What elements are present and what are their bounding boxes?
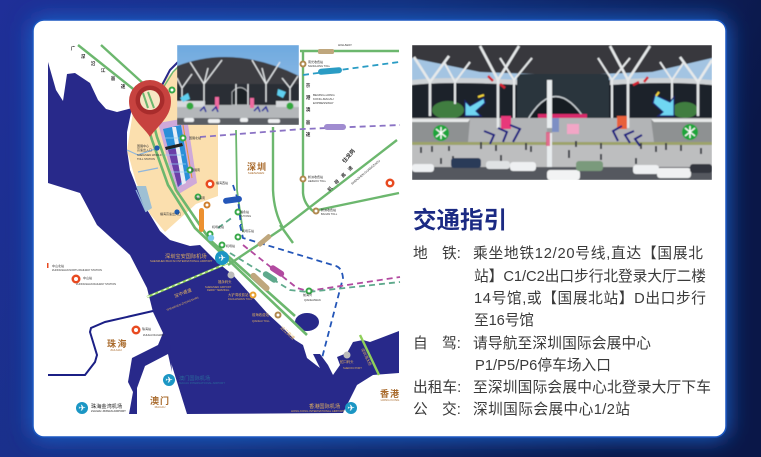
map panel: 高速出入口 xyxy=(137,147,152,152)
sky xyxy=(412,58,712,80)
blue toll stations xyxy=(154,145,180,215)
map panel: FERRY TERMINAL xyxy=(207,288,230,292)
map panel: HONG KONG INTERNATIONAL AIRPORT xyxy=(291,409,345,413)
map panel: SHEKOU PORT xyxy=(343,366,362,370)
water: Macau channel xyxy=(128,333,172,414)
railway stations xyxy=(47,178,394,334)
building side xyxy=(412,80,712,118)
map panel: 国展南 xyxy=(191,167,200,172)
road labels: 速 xyxy=(121,83,126,90)
entrance banners xyxy=(488,76,648,134)
metro directions xyxy=(413,245,706,329)
road xyxy=(412,167,712,180)
trees xyxy=(432,101,464,119)
map panel: SHENZHEN AIRPORT xyxy=(205,285,232,289)
map panel: SHENZHEN BAO'AN INTERNATIONAL AIRPORT xyxy=(150,259,213,263)
airport labels xyxy=(165,252,340,410)
map panel: EXPRESSWAY xyxy=(313,101,334,105)
route pills xyxy=(199,49,346,292)
cyan arrows xyxy=(465,98,485,116)
inset photo: hall entrance xyxy=(177,45,299,125)
roof xyxy=(412,45,712,74)
map panel: BEIJING-HONG xyxy=(313,93,335,97)
map panel: SHENZHEN WORLD xyxy=(137,153,162,157)
driving directions: 自 xyxy=(413,335,428,352)
station markers xyxy=(170,62,350,358)
map panel: TOLL STATION xyxy=(137,157,155,161)
road labels: 京 xyxy=(306,82,311,88)
driving directions xyxy=(413,335,651,374)
map panel: SHENZHEN-ZHONGSHAN xyxy=(166,295,199,312)
metro directions: 铁: xyxy=(442,245,461,262)
map panel: 沿江高速 xyxy=(279,324,297,342)
road labels: 广 xyxy=(71,45,76,52)
map panel: ✈ xyxy=(218,253,226,263)
location pin xyxy=(129,80,171,137)
road labels xyxy=(71,45,358,193)
columns xyxy=(414,46,712,128)
map panel: 机场东站 xyxy=(242,228,254,233)
driving directions: P1/P5/P6停车场入口 xyxy=(475,357,611,374)
driving directions: 驾: xyxy=(442,335,461,352)
map panel: QIANHAI TOLL xyxy=(252,319,270,323)
map panel: 福海西站 xyxy=(216,180,228,185)
map panel: ZHUHAI JINWAN AIRPORT xyxy=(91,409,126,413)
map panel: 中山北站 xyxy=(52,263,64,268)
map panel: HONG KONG xyxy=(381,398,400,402)
airport labels: 澳门国际机场 xyxy=(179,374,210,382)
plaza xyxy=(412,117,712,142)
map panel: HIGHWAY xyxy=(338,43,352,47)
map panel: 机场北站 xyxy=(212,224,224,229)
airport labels: 深圳宝安国际机场 xyxy=(165,252,207,260)
dashed routes xyxy=(200,62,400,358)
map panel: 前海收费站 xyxy=(252,312,270,317)
map panel: 深圳湾大桥 xyxy=(360,347,373,367)
bus directions: 交: xyxy=(442,400,461,418)
metro directions: 乘坐地铁12/20号线,直达【国展北 xyxy=(473,245,703,262)
bus directions: 深圳国际会展中心1/2站 xyxy=(473,401,630,418)
expo center xyxy=(158,118,197,195)
road labels: 港 xyxy=(306,94,311,100)
road labels: 澳 xyxy=(306,106,311,113)
road labels: 往龙岗 xyxy=(340,147,357,164)
road labels: 沿 xyxy=(91,60,96,67)
map panel: SHENZHEN-GUANGZHOU xyxy=(350,159,381,186)
coast: Zhuhai river xyxy=(48,311,153,375)
traffic guide text xyxy=(413,245,711,418)
central hall xyxy=(517,74,609,118)
map panel: 蛇口码头 xyxy=(340,359,354,364)
cars xyxy=(412,158,712,180)
map panel: 鹤洲收费站 xyxy=(321,207,336,212)
navy chevrons xyxy=(484,125,642,146)
map panel: 中山站 xyxy=(83,275,92,280)
map panel: ZHUHAI xyxy=(110,348,122,352)
map panel: 深中通道 xyxy=(173,286,193,300)
map panel: 鹤洲收费站 xyxy=(308,174,323,179)
map panel: MACAU INTERNATIONAL AIRPORT xyxy=(179,381,225,385)
airport icons xyxy=(76,235,357,414)
metro directions: 至16号馆 xyxy=(474,312,534,329)
map panel: HEZHOU TOLL xyxy=(308,179,327,183)
road labels: 深 xyxy=(81,53,86,60)
metro directions: 站】C1/C2出口步行北登录大厅二楼 xyxy=(474,268,706,285)
crowd xyxy=(420,141,702,164)
city names: 香港 xyxy=(380,388,400,399)
bridge xyxy=(147,263,228,297)
road labels: 速 xyxy=(306,131,311,138)
map panel: FUYONG xyxy=(240,214,251,218)
map panel: ZHONGSHAN RAILWAY STATION xyxy=(76,282,116,286)
map panel: 国展中心 xyxy=(137,143,149,148)
map panel xyxy=(47,43,400,414)
map panel: ✈ xyxy=(165,375,173,385)
map panel: 国展北站 xyxy=(189,135,201,140)
map panel: 福海南 xyxy=(196,195,205,200)
map panel: QIANHAIWAN xyxy=(304,298,321,302)
expressway lines xyxy=(78,45,399,335)
city names: 珠海 xyxy=(107,338,128,349)
map panel: NANGUANG TOLL xyxy=(308,64,331,68)
map panel: 南光收费站 xyxy=(308,59,323,64)
Hong Kong bridge xyxy=(360,335,379,375)
map panel: DACHANWAN TOLL xyxy=(228,297,253,301)
metro directions: 14号馆,或【国展北站】D出口步行 xyxy=(474,290,706,307)
map panel: ✈ xyxy=(347,403,355,413)
city names: 深圳 xyxy=(247,161,267,172)
metro icons xyxy=(433,125,449,141)
road labels: 机荷高速 xyxy=(326,161,358,193)
metro directions: 地 xyxy=(413,245,428,262)
map panel: 前海湾 xyxy=(303,292,312,297)
photo: exhibition hall entrance with metro exits xyxy=(412,45,712,180)
map panel: 福海高速出入口 xyxy=(160,211,181,216)
road labels: 高 xyxy=(111,75,116,82)
road labels: 高 xyxy=(306,119,311,126)
city names: 澳门 xyxy=(150,395,170,406)
map panel: BAOAN TOLL xyxy=(321,212,338,216)
map panel: 福永码头 xyxy=(218,279,232,284)
airport labels: 香港国际机场 xyxy=(309,402,340,410)
bus directions: 公 xyxy=(413,402,428,418)
map panel: 大铲湾收费站 xyxy=(228,292,249,297)
water: bay xyxy=(48,62,399,414)
bus directions xyxy=(413,400,630,418)
map panel: 机场站 xyxy=(226,243,235,248)
map panel: 福永站 xyxy=(240,209,249,214)
driving directions: 请导航至深圳国际会展中心 xyxy=(473,335,651,352)
river channels xyxy=(127,148,158,212)
city names xyxy=(107,161,400,406)
map panel: SHENZHEN xyxy=(248,171,264,175)
map panel: KONG-MACAU xyxy=(313,97,334,101)
road labels: 江 xyxy=(101,67,106,74)
lamp post xyxy=(547,80,552,180)
land: Shenzhen peach area xyxy=(127,66,218,232)
taxi directions: 出租车: xyxy=(413,379,461,396)
map panel: MACAU xyxy=(155,405,165,409)
taxi directions: 至深圳国际会展中心北登录大厅下车 xyxy=(473,379,711,396)
map panel: ZHUHAI RAILWAY xyxy=(143,333,165,337)
map panel: ZHONGSHAN NORTH RAILWAY STATION xyxy=(52,268,102,272)
heading: 交通指引 xyxy=(413,206,507,233)
map panel: 珠海金湾机场 xyxy=(91,402,122,410)
map panel: 珠海站 xyxy=(142,326,151,331)
lake xyxy=(295,313,319,331)
low buildings xyxy=(412,119,712,142)
map panel: ✈ xyxy=(78,403,86,413)
